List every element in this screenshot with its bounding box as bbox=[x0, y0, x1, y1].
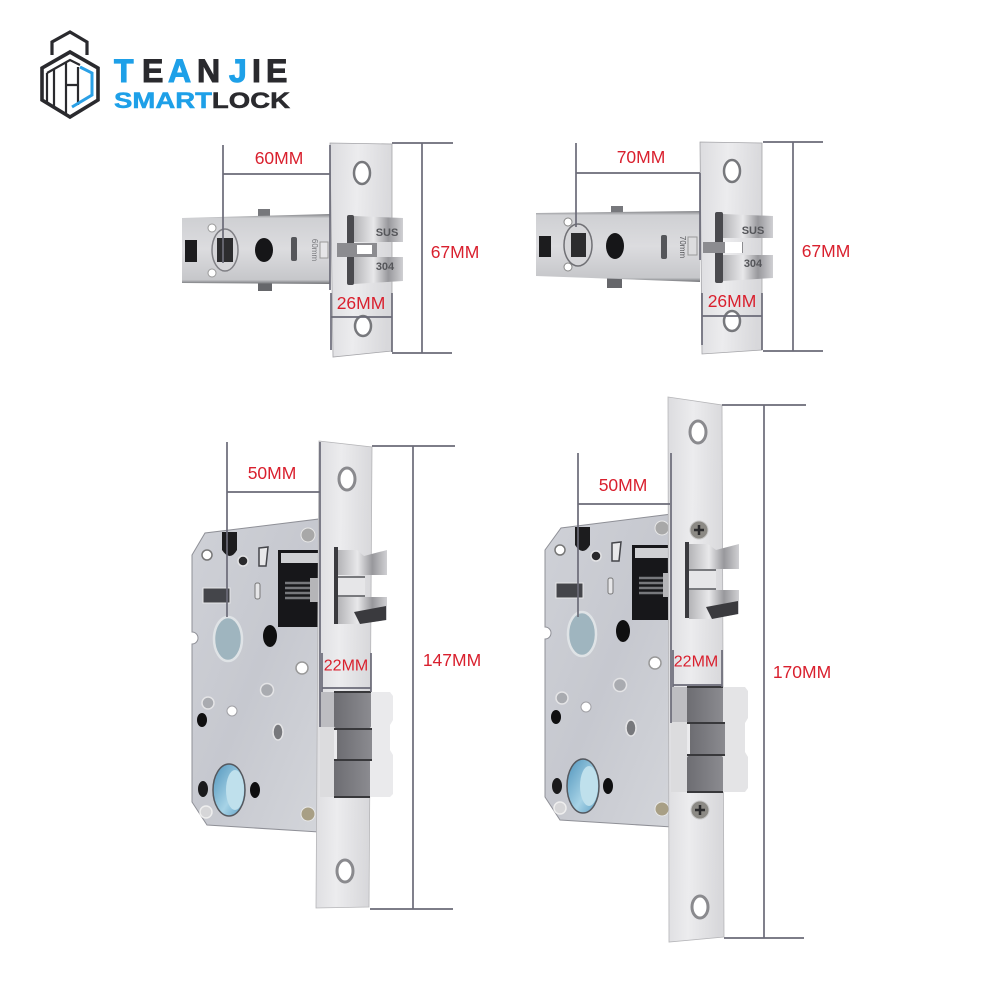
logo: Teanjie Smartlock bbox=[42, 32, 290, 117]
icon: faceplate screws bbox=[690, 521, 709, 819]
latch bolt: SUS bbox=[742, 225, 764, 237]
label: 70MM: 70MM bbox=[617, 147, 665, 167]
faceplate bbox=[700, 142, 762, 354]
latch bolt: 304 bbox=[376, 261, 395, 273]
label: 170MM: 170MM bbox=[773, 662, 831, 682]
lock case bbox=[545, 514, 672, 827]
brand name: E bbox=[266, 53, 287, 89]
brand name: I bbox=[252, 53, 261, 89]
brand name: E bbox=[142, 53, 163, 89]
faceplate bbox=[316, 441, 372, 908]
dimension lines bbox=[576, 142, 823, 351]
latch body: 70mm bbox=[678, 236, 687, 258]
label: 50MM: 50MM bbox=[599, 475, 647, 495]
latch bolt bbox=[703, 212, 773, 283]
label: 26MM: 26MM bbox=[337, 293, 385, 313]
label: 147MM: 147MM bbox=[423, 650, 481, 670]
brand name: N bbox=[197, 53, 220, 89]
panel: 170mm mortise lock bbox=[545, 397, 831, 942]
latch body bbox=[536, 206, 700, 288]
latch bolt: 304 bbox=[744, 258, 763, 270]
label: 67MM: 67MM bbox=[431, 242, 479, 262]
label: 22MM: 22MM bbox=[324, 658, 368, 674]
latch bolt: SUS bbox=[376, 227, 398, 239]
panel: 60mm tubular latch bbox=[182, 143, 479, 357]
label: 60MM: 60MM bbox=[255, 148, 303, 168]
latch bolt bbox=[685, 542, 739, 619]
brand tagline: SMART LOCK bbox=[114, 88, 290, 113]
brand name: T bbox=[114, 53, 134, 89]
panel: 147mm mortise lock bbox=[192, 441, 481, 909]
label: 50MM: 50MM bbox=[248, 463, 296, 483]
latch bolt bbox=[337, 215, 403, 285]
label: 22MM: 22MM bbox=[674, 654, 718, 670]
latch body bbox=[182, 209, 330, 291]
brand name: J bbox=[229, 53, 247, 89]
lock case bbox=[192, 519, 319, 832]
dimension lines bbox=[227, 442, 455, 909]
label: 67MM: 67MM bbox=[802, 241, 850, 261]
brand name: A bbox=[168, 53, 191, 89]
icon: padlock hexagon monogram bbox=[42, 32, 98, 117]
deadbolt bbox=[671, 687, 748, 792]
latch body: 60mm bbox=[310, 239, 319, 261]
faceplate bbox=[330, 143, 392, 357]
deadbolt bbox=[320, 692, 393, 797]
panel: 70mm tubular latch bbox=[536, 142, 850, 354]
latch bolt bbox=[334, 547, 387, 624]
dimension lines bbox=[578, 405, 806, 938]
label: 26MM: 26MM bbox=[708, 291, 756, 311]
faceplate bbox=[668, 397, 724, 942]
dimension lines bbox=[223, 143, 453, 353]
